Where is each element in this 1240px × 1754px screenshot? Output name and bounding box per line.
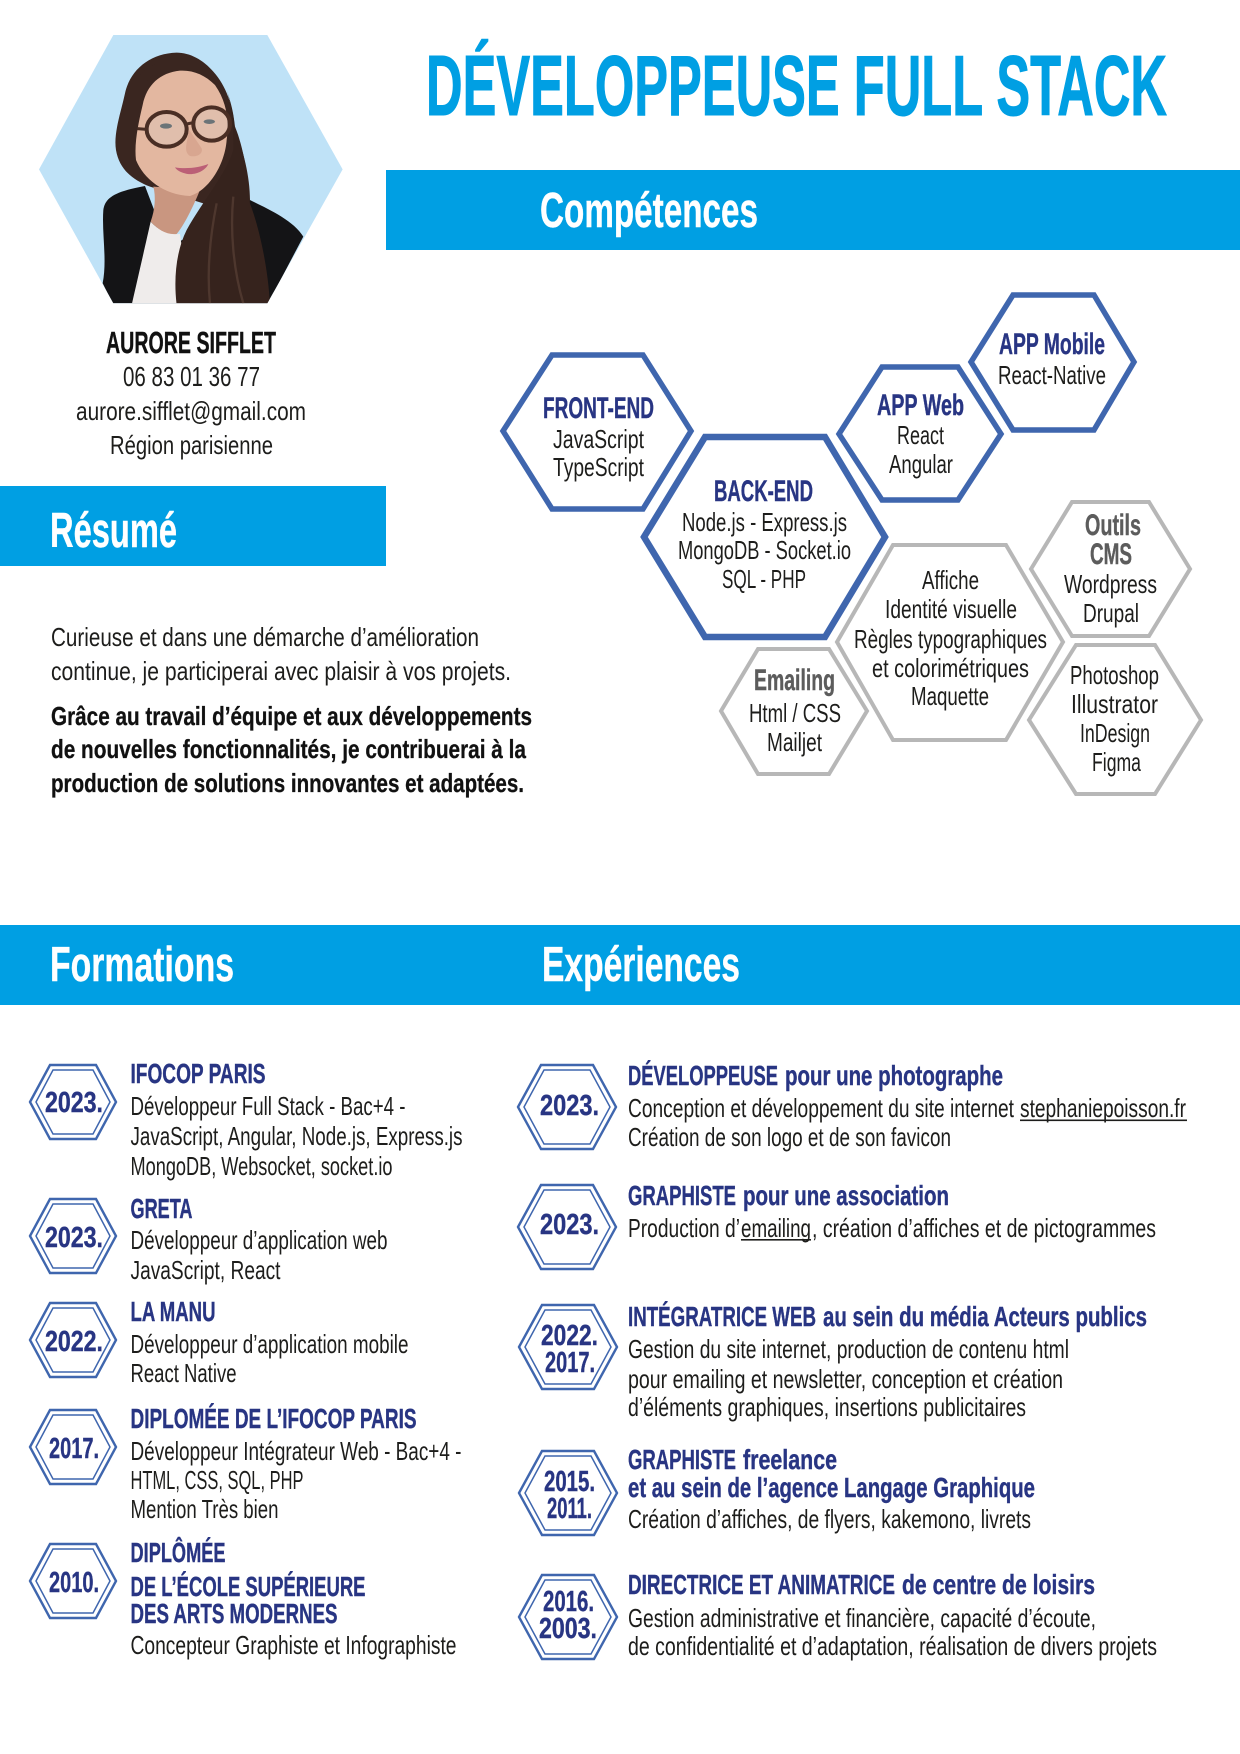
formation: GRETA: JavaScript, React [130,1255,281,1285]
eyes [160,123,172,129]
heading bar: Résumé [0,486,386,566]
skills hexagon: Front-end: FRONT-END [543,392,654,425]
experience: graphiste freelance [628,1444,1035,1534]
nose [186,130,202,156]
year badge: formation 2010 [30,1544,116,1618]
year badge: formation 2023 [30,1065,116,1139]
skills hexagon: App Mobile [971,295,1134,430]
year badge: formation 2010: 2010. [49,1567,99,1599]
experience: intégratrice web [628,1301,1147,1422]
neck [151,187,200,234]
formation: Diplômée IFOCOP: Développeur Intégrateur Web - Bac+4 - [130,1436,462,1466]
skills hexagon: graphic design [837,545,1063,740]
forehead shadow hair [127,60,177,147]
skills hexagon: Photoshop tools [1029,645,1201,794]
year badge: experience 2015-2011: 2015. [544,1466,595,1498]
skills hexagon: graphic design: Identité visuelle [885,594,1017,624]
résumé text: Curieuse et dans une démarche d’amélioration [51,622,479,652]
formation: École supérieure des arts modernes: DE L’ÉCOLE SUPÉRIEURE [130,1571,366,1602]
portrait photo in hexagon [39,35,343,305]
year badge: experience 2016-2003 [519,1575,617,1659]
skills hexagon: Outils CMS: Wordpress [1064,569,1157,599]
experience: graphiste association [628,1180,1156,1243]
experience: graphiste association: Production d’ [628,1213,740,1243]
experience: développeuse: stephaniepoisson.fr [1020,1093,1186,1123]
skills hexagon: Back-end [644,437,885,637]
experience: graphiste association: GRAPHISTE [628,1180,736,1211]
contact block: Région parisienne [110,430,273,460]
year badge: formation 2023 GRETA: 2023. [45,1222,103,1254]
formation: La Manu: React Native [130,1358,236,1388]
face [135,71,228,196]
experience: développeuse [628,1060,1187,1152]
experience: graphiste freelance: GRAPHISTE [628,1444,736,1475]
résumé text [51,622,532,798]
year badge: experience 2023 association [518,1185,616,1269]
experience: directrice et animatrice: DIRECTRICE ET ANIMATRICE [628,1569,895,1600]
formation: La Manu [130,1296,408,1388]
skills hexagon: Outils CMS: CMS [1090,538,1132,571]
experience: directrice et animatrice: de centre de loisirs [902,1569,1095,1600]
formation: IFOCOP Paris: IFOCOP PARIS [130,1058,266,1089]
formation: GRETA: Développeur d’application web [130,1225,388,1255]
year badge: experience 2023 photographer: 2023. [540,1090,599,1122]
skills hexagon: Outils CMS: Outils [1085,509,1141,542]
experience: graphiste freelance: Création d’affiches, de flyers, kakemono, livrets [628,1504,1031,1534]
blouse [132,222,190,305]
year badge: experience 2023 association: 2023. [540,1209,599,1241]
skills hexagon: App Web: Angular [889,449,953,479]
formation: École supérieure des arts modernes [130,1536,456,1660]
skills hexagon: Front-end: JavaScript [553,424,645,454]
year badge: experience 2023 photographer [518,1065,616,1149]
year badge: experience 2022-2017 [519,1305,617,1389]
experience: développeuse: pour une photographe [785,1060,1003,1091]
skills hexagon: Back-end: Node.js - Express.js [682,507,847,537]
experience: graphiste association: emailing [741,1213,811,1243]
skills hexagon: Emailing: Mailjet [767,727,823,757]
formation: GRETA: GRETA [130,1193,192,1224]
experience: développeuse: Conception et développement du site internet [628,1093,1015,1123]
résumé text: Grâce au travail d’équipe et aux développements [51,701,532,731]
formation: IFOCOP Paris: MongoDB, Websocket, socket.io [130,1151,392,1181]
skills hexagon: graphic design: Affiche [922,565,979,595]
skills hexagon: Emailing: Emailing [754,664,835,697]
contact block: AURORE SIFFLET [106,325,276,360]
skills hexagon: Photoshop tools: Figma [1092,747,1141,777]
experience: graphiste freelance: et au sein de l’agence Langage Graphique [628,1472,1035,1503]
formation: École supérieure des arts modernes: DES ARTS MODERNES [130,1598,338,1629]
skills hexagon: Emailing: Html / CSS [749,698,841,728]
résumé text: continue, je participerai avec plaisir à vos projets. [51,656,511,686]
contact block [76,325,306,460]
heading bar: Compétences: Compétences [540,184,758,238]
skills hexagon: Emailing [721,649,867,774]
heading bar: Formations and Expériences: Formations [50,938,234,992]
year badge: experience 2022-2017: 2022. [541,1320,598,1352]
formation: GRETA [130,1193,388,1285]
formation: IFOCOP Paris [130,1058,462,1181]
skills hexagon: Outils CMS [1031,502,1190,636]
year badge: formation 2017 [30,1410,116,1484]
experience: directrice et animatrice: Gestion administrative et financière, capacité d’écoute, [628,1603,1096,1633]
year badge: experience 2015-2011 [519,1451,617,1535]
formation: IFOCOP Paris: Développeur Full Stack - Bac+4 - [130,1091,406,1121]
skills hexagon: Photoshop tools: InDesign [1080,718,1150,748]
year badge: formation 2017: 2017. [49,1433,99,1465]
skills hexagon: graphic design: et colorimétriques [872,653,1029,683]
formation: Diplômée IFOCOP [130,1403,462,1524]
glasses [147,107,230,147]
year badge: experience 2022-2017: 2017. [545,1347,595,1379]
formation: La Manu: LA MANU [130,1296,216,1327]
skills hexagon: Photoshop tools: Illustrator [1071,689,1158,719]
experience: intégratrice web: pour emailing et newsletter, conception et création [628,1364,1063,1394]
year badge: experience 2015-2011: 2011. [547,1493,592,1525]
year badge: experience 2016-2003: 2016. [543,1586,594,1618]
skills hexagon: Front-end: TypeScript [553,452,645,482]
heading bar: Résumé: Résumé [50,504,177,558]
heading bar: Formations and Expériences: Expériences [542,938,740,992]
contact block: 06 83 01 36 77 [123,361,260,392]
experience: graphiste freelance: freelance [743,1444,837,1475]
experience: intégratrice web: Gestion du site internet, production de contenu html [628,1334,1069,1364]
jacket [103,186,303,305]
skills hexagon: graphic design: Maquette [911,681,989,711]
formation: École supérieure des arts modernes: Concepteur Graphiste et Infographiste [130,1630,456,1660]
long hair over shoulder [175,90,270,305]
year badge: formation 2023: 2023. [45,1087,103,1119]
heading bar: Formations and Expériences [0,925,1240,1005]
skills hexagon: App Mobile: APP Mobile [999,328,1105,361]
skills hexagon: Back-end: MongoDB - Socket.io [678,535,851,565]
skills hexagon: Front-end [503,355,691,509]
experience: développeuse: DÉVELOPPEUSE [628,1060,778,1091]
formation: IFOCOP Paris: JavaScript, Angular, Node.js, Express.js [130,1121,462,1151]
skills hexagon: Outils CMS: Drupal [1083,598,1139,628]
skills hexagon: Back-end: BACK-END [714,475,813,508]
year badge: formation 2023 GRETA [30,1199,116,1273]
lips [175,164,208,174]
skills hexagon: App Mobile: React-Native [998,360,1106,390]
skills hexagon: App Web: APP Web [877,389,964,422]
formation: Diplômée IFOCOP: Mention Très bien [130,1494,278,1524]
skills hexagon: Photoshop tools: Photoshop [1070,660,1159,690]
experience: graphiste association: pour une association [743,1180,949,1211]
résumé text: de nouvelles fonctionnalités, je contribuerai à la [51,734,526,764]
formation: Diplômée IFOCOP: HTML, CSS, SQL, PHP [130,1465,304,1495]
experience: développeuse: Création de son logo et de son favicon [628,1122,951,1152]
experience: intégratrice web: INTÉGRATRICE WEB [628,1301,816,1332]
formation: Diplômée IFOCOP: DIPLOMÉE DE L’IFOCOP PARIS [130,1403,416,1434]
résumé text: production de solutions innovantes et adaptées. [51,768,524,798]
skills hexagon: App Web: React [897,420,945,450]
heading bar: Compétences [386,170,1240,250]
skills hexagon: Back-end: SQL - PHP [722,564,806,594]
experience: intégratrice web: d’éléments graphiques, insertions publicitaires [628,1392,1026,1422]
formation: École supérieure des arts modernes: DIPLÔMÉE [130,1536,226,1568]
formation: La Manu: Développeur d’application mobile [130,1329,408,1359]
year badge: formation 2022 [30,1303,116,1377]
experience: directrice et animatrice [628,1569,1157,1661]
year badge: formation 2022: 2022. [45,1326,103,1358]
hair back [115,53,250,217]
contact block: aurore.sifflet@gmail.com [76,396,306,426]
skills hexagon: App Web [839,367,1001,500]
year badge: experience 2016-2003: 2003. [539,1613,597,1645]
skills hexagon: graphic design: Règles typographiques [854,624,1047,654]
